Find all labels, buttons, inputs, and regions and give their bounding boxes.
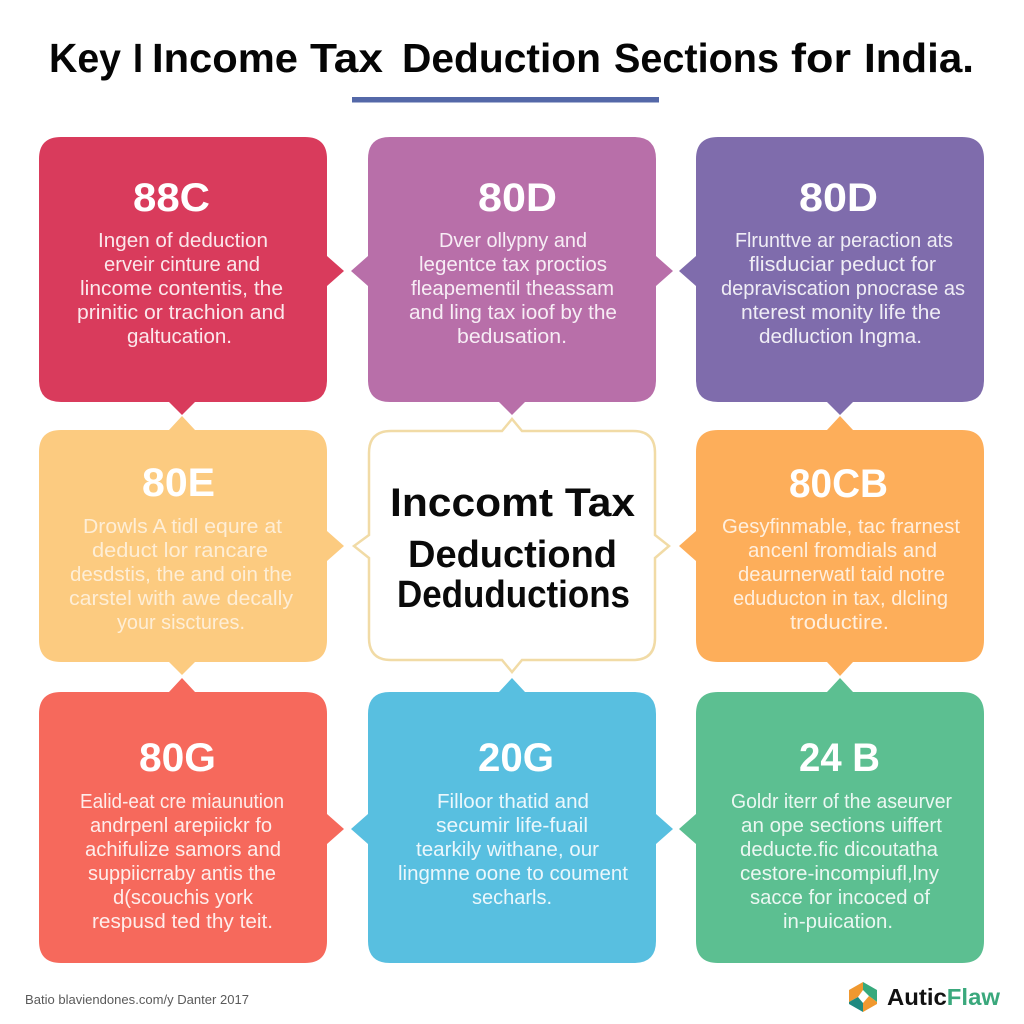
body text: Filloor thatid and (437, 791, 589, 813)
body text: in-puication. (783, 911, 893, 933)
panel: 80D right (679, 137, 984, 415)
title: for (791, 35, 851, 81)
body text: tearkily withane, our (416, 839, 599, 861)
body text: lingmne oone to coument (398, 863, 628, 885)
body text: andrpenl arepiickr fo (90, 815, 272, 837)
heading: 88C (133, 176, 210, 220)
body text: flisduciar peduct for (749, 254, 936, 276)
body text (77, 230, 285, 348)
centre outline (354, 419, 669, 672)
card shape (39, 678, 344, 963)
centre heading: Deduductions (397, 574, 630, 616)
body text: your sisctures. (117, 612, 245, 634)
heading: 80E (142, 461, 215, 505)
body text: achifulize samors and (85, 839, 281, 861)
body text: an ope sections uiffert (741, 815, 942, 837)
card shape (351, 137, 673, 415)
title: Key (49, 35, 121, 81)
body text: and ling tax ioof by the (409, 302, 617, 324)
title: Deduction (402, 35, 601, 81)
panel: 80G (39, 678, 344, 963)
body text: Ingen of deduction (98, 230, 268, 252)
body text (409, 230, 617, 348)
panel: 80CB (679, 416, 984, 676)
panel: 88C (39, 137, 344, 415)
body text (721, 230, 965, 348)
body text: Dver ollypny and (439, 230, 587, 252)
body text: suppiicrraby antis the (88, 863, 276, 885)
heading: 80D (799, 176, 878, 220)
title: Tax (310, 35, 383, 81)
body text: ancenl fromdials and (748, 540, 937, 562)
logo wordmark: AuticFlaw (887, 984, 1000, 1010)
title: Sections (614, 35, 779, 81)
card shape (39, 137, 344, 415)
body text: sacce for incoced of (750, 887, 930, 909)
body text: bedusation. (457, 326, 567, 348)
body text: deducte.fic dicoutatha (740, 839, 939, 861)
centre heading: Inccomt Tax (390, 481, 635, 525)
body text: Goldr iterr of the aseurver (731, 791, 952, 813)
icon: logo hexagon (849, 982, 877, 1012)
body text: d(scouchis york (113, 887, 254, 909)
body text: Drowls A tidl equre at (83, 516, 282, 538)
centre heading: Deductiond (408, 534, 617, 576)
card shape (679, 416, 984, 676)
body text: erveir cinture and (104, 254, 260, 276)
body text: Gesyfinmable, tac frarnest (722, 516, 960, 538)
panel: 80D left (351, 137, 673, 415)
panel: 20G (351, 678, 673, 963)
body text: legentce tax proctios (419, 254, 607, 276)
logo (849, 982, 1000, 1012)
body text: nterest monity life the (741, 302, 941, 324)
body text: dedluction Ingma. (759, 326, 922, 348)
body text: fleapementil theassam (411, 278, 614, 300)
title: India. (864, 35, 974, 81)
heading: 20G (478, 736, 554, 780)
panel: 80E (39, 416, 344, 675)
body text: secharls. (472, 887, 552, 909)
body text: respusd ted thy teit. (92, 911, 273, 933)
heading: 80CB (789, 462, 888, 506)
body text: deaurnerwatl taid notre (738, 564, 945, 586)
body text: carstel with awe decally (69, 588, 293, 610)
body text: Ealid-eat cre miaunution (80, 791, 284, 813)
body text (722, 516, 960, 634)
body text: prinitic or trachion and (77, 302, 285, 324)
heading: 80D (478, 176, 557, 220)
body text: troductire. (790, 612, 889, 634)
body text: lincome contentis, the (80, 278, 283, 300)
centre heading (390, 481, 635, 616)
body text (398, 791, 628, 909)
card shape (679, 137, 984, 415)
body text (80, 791, 284, 933)
body text: galtucation. (127, 326, 232, 348)
card shape (39, 416, 344, 675)
panel: 24 B (679, 678, 984, 963)
card shape (679, 678, 984, 963)
heading: 80G (139, 736, 216, 780)
body text (69, 516, 293, 634)
body text: Flrunttve ar peraction ats (735, 230, 953, 252)
title (49, 35, 974, 81)
body text: eduducton in tax, dlcling (733, 588, 948, 610)
title underline (352, 97, 659, 102)
panel: centre title (354, 419, 669, 672)
body text: secumir life-fuail (436, 815, 588, 837)
body text (731, 791, 952, 933)
body text: depraviscation pnocrase as (721, 278, 965, 300)
title: I (133, 35, 143, 81)
body text: deduct lor rancare (92, 540, 268, 562)
footer source: Batio blaviendones.com/y Danter 2017 (25, 992, 249, 1007)
heading: 24 B (799, 736, 880, 780)
body text: desdstis, the and oin the (70, 564, 292, 586)
body text: cestore-incompiufl,lny (740, 863, 939, 885)
card shape (351, 678, 673, 963)
title: Income (152, 35, 298, 81)
